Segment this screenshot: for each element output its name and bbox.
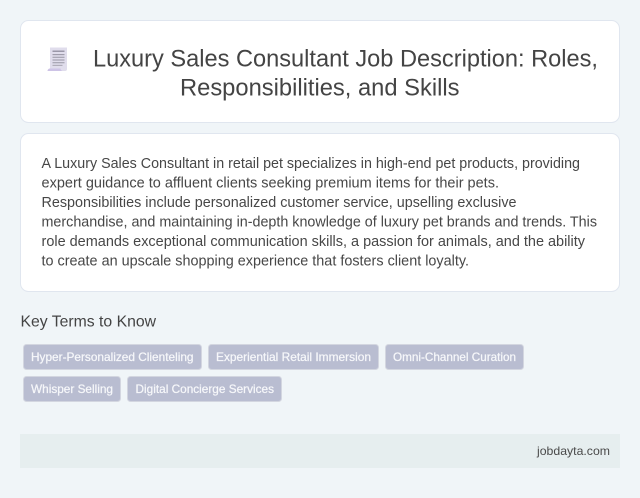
title text: Luxury Sales Consultant Job Description: Roles, [93,46,598,72]
tag: Experiential Retail Immersion: Experiential Retail Immersion [216,350,371,364]
description text: to create an upscale shopping experience that fosters client loyalty. [42,254,469,270]
tag: Experiential Retail Immersion [208,344,378,370]
tag: Whisper Selling: Whisper Selling [31,382,113,396]
tag: Digital Concierge Services: Digital Concierge Services [136,382,274,396]
description text: Responsibilities include personalized customer service, upselling exclusive [42,195,516,211]
footer source text: jobdayta.com [536,444,610,458]
icon: paper scroll [48,48,67,71]
panel: description card [20,134,620,292]
description text: role demands exceptional communication skills, a passion for animals, and the ability [42,234,586,250]
tag: Hyper-Personalized Clienteling [24,344,202,370]
description text: merchandise, and maintaining in-depth knowledge of luxury pet brands and trends. This [42,214,597,230]
description text: expert guidance to affluent clients seeking premium items for their pets. [42,176,499,192]
title text [93,46,598,102]
tag: Digital Concierge Services [128,376,282,402]
tag: Omni-Channel Curation [386,344,524,370]
tag: Hyper-Personalized Clienteling: Hyper-Personalized Clienteling [31,350,194,364]
description text [42,156,597,270]
heading: key terms: Key Terms to Know [20,314,156,330]
panel: title card [20,20,620,122]
description text: A Luxury Sales Consultant in retail pet specializes in high-end pet products, providing [42,156,580,172]
title text: Responsibilities, and Skills [180,74,460,102]
footer bar [20,434,620,468]
tag: Whisper Selling [24,376,120,402]
tag: Omni-Channel Curation: Omni-Channel Curation [393,350,516,364]
